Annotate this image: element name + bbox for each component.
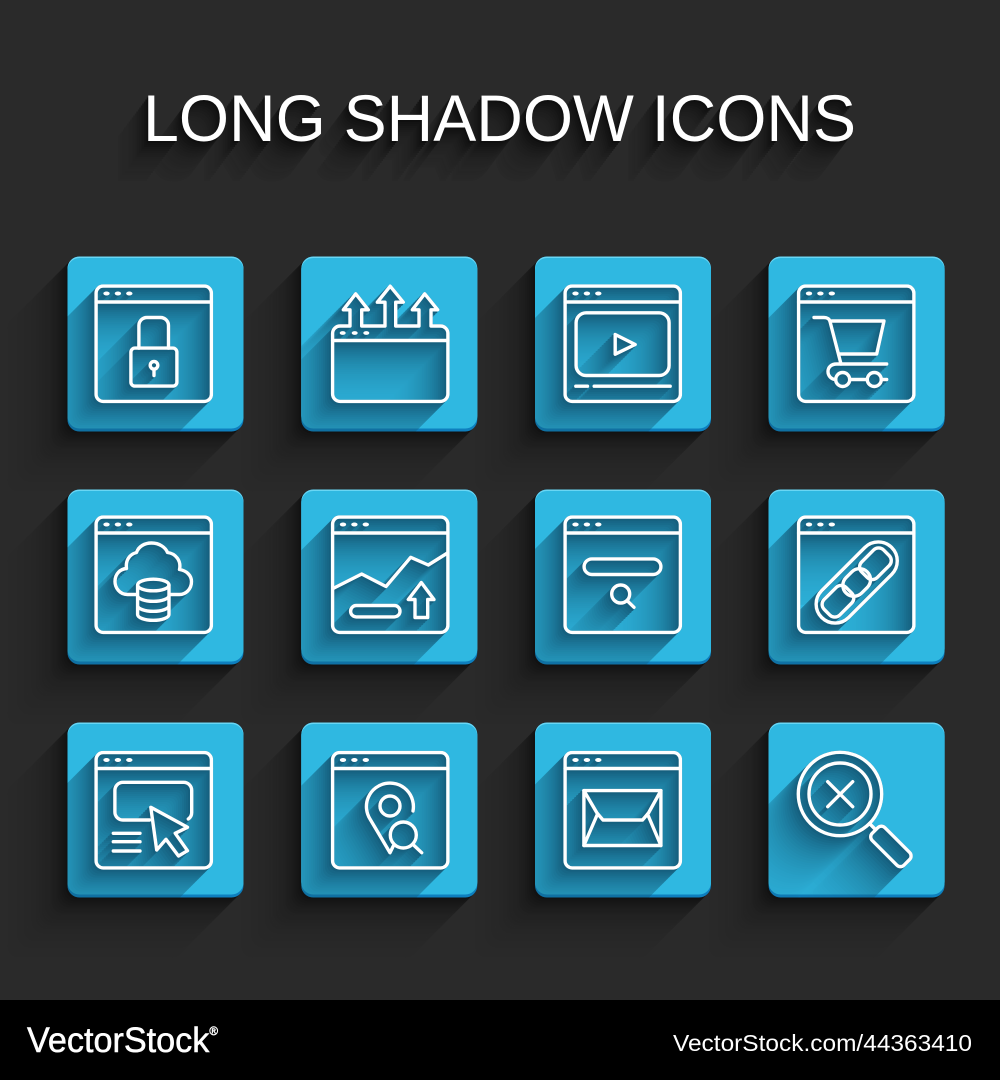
icon card: browser with button and cursor bbox=[68, 722, 244, 898]
title long shadow: LONG SHADOW ICONS bbox=[143, 81, 856, 155]
icon card: browser with padlock bbox=[68, 256, 244, 432]
icon card: browser with video player bbox=[535, 256, 711, 432]
icon card: browser with cloud database bbox=[68, 490, 244, 664]
footer bar bbox=[0, 1000, 1000, 1080]
icon card: browser with shopping cart bbox=[769, 256, 945, 432]
icon card: browser with envelope bbox=[535, 722, 711, 898]
icon card: browser with upward arrows bbox=[301, 256, 477, 432]
icon card: browser with location pin and magnifier bbox=[301, 722, 477, 898]
footer logo text: VectorStock bbox=[27, 1021, 214, 1060]
card long shadows bbox=[68, 256, 945, 898]
footer logo text: ® bbox=[209, 1024, 218, 1038]
icon card: browser with chain link bbox=[769, 490, 945, 664]
footer image id: VectorStock.com/44363410 bbox=[673, 1030, 972, 1056]
icon card: browser with rising chart bbox=[301, 490, 477, 664]
title: LONG SHADOW ICONS bbox=[143, 81, 856, 155]
icon card: magnifier with cross bbox=[769, 722, 945, 898]
icon card: browser with search bar bbox=[535, 490, 711, 664]
